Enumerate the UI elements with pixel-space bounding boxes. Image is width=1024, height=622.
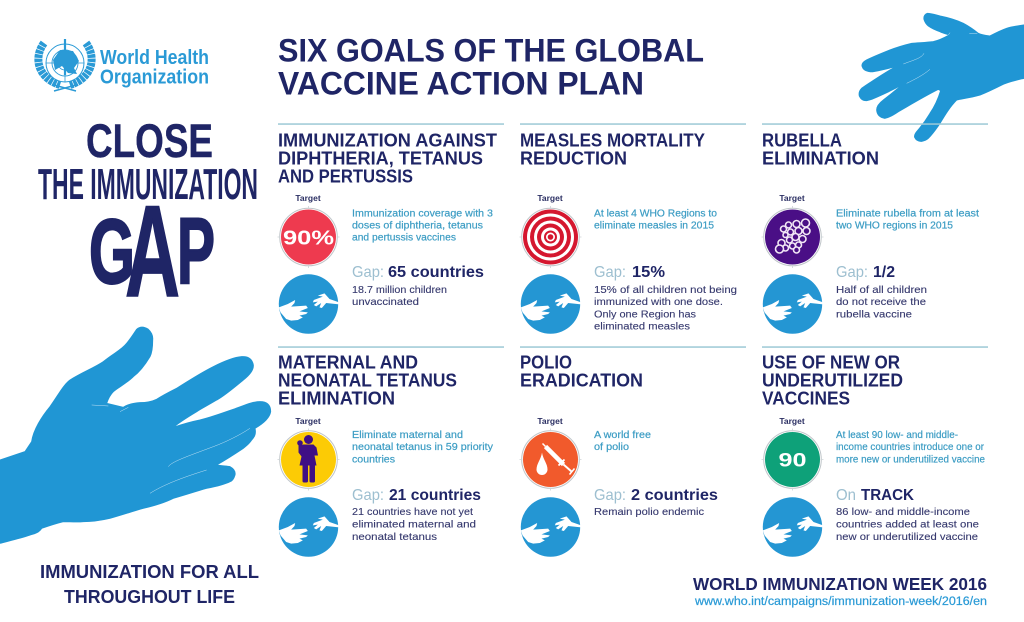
heading: ELIMINATION <box>762 148 879 168</box>
logo text: Organization <box>100 66 209 88</box>
icon: hands <box>521 274 581 334</box>
target description <box>352 430 493 466</box>
icon: 90 percent target <box>278 206 340 268</box>
panel: WHO logo <box>38 39 209 91</box>
footer: world immunization week: WORLD IMMUNIZATION WEEK 2016 <box>693 574 987 594</box>
gap description: 15% of all children not being <box>594 284 737 296</box>
slogan: immunization for all throughout life: THROUGHOUT LIFE <box>64 587 235 607</box>
status description <box>836 506 979 543</box>
heading: close the immunization gap: A <box>125 178 180 324</box>
status description: 86 low- and middle-income <box>836 506 970 518</box>
campaign url: www.who.int/campaigns/immunization-week/2016/en <box>694 596 987 608</box>
heading: POLIO <box>520 352 572 372</box>
status description: countries added at least one <box>836 518 979 530</box>
icon: 90 target: 90 <box>778 450 807 472</box>
title: SIX GOALS OF THE GLOBAL <box>278 32 704 68</box>
logo text <box>100 47 209 88</box>
icon: rubella virus cluster <box>762 206 824 268</box>
gap description: Only one Region has <box>594 308 696 320</box>
heading <box>278 352 457 408</box>
heading <box>520 352 643 390</box>
heading: RUBELLA <box>762 130 842 150</box>
panel: diphtheria, tetanus and pertussis <box>278 123 504 334</box>
gap description: immunized with one dose. <box>594 296 723 308</box>
heading: REDUCTION <box>520 148 627 168</box>
heading: close the immunization gap <box>38 114 258 324</box>
target description <box>836 430 985 466</box>
heading: AND PERTUSSIS <box>278 166 413 186</box>
target description: At least 4 WHO Regions to <box>594 208 717 220</box>
gap description: 18.7 million children <box>352 284 447 296</box>
target description: Eliminate maternal and <box>352 430 463 441</box>
panel: new or underutilized vaccines <box>762 346 988 557</box>
target description: A world free <box>594 430 651 441</box>
target description <box>594 430 651 453</box>
heading: close the immunization gap: P <box>177 198 215 303</box>
gap description <box>594 284 737 332</box>
gap description: Half of all children <box>836 284 927 296</box>
gap value: Gap: <box>594 264 626 281</box>
heading: close the immunization gap: G <box>89 201 135 303</box>
gap description <box>352 506 476 543</box>
target description <box>836 208 979 232</box>
panel: polio eradication <box>520 346 746 557</box>
gap description <box>836 284 927 320</box>
gap value <box>594 264 665 281</box>
icon: mother and child <box>278 428 340 490</box>
gap description <box>352 284 447 308</box>
gap description: 21 countries have not yet <box>352 506 473 518</box>
illustration: large left hand <box>0 327 271 543</box>
heading: USE OF NEW OR <box>762 352 900 372</box>
target description: eliminate measles in 2015 <box>594 220 714 232</box>
heading <box>278 130 497 186</box>
gap description: Remain polio endemic <box>594 506 704 518</box>
heading: MATERNAL AND <box>278 352 418 372</box>
gap description: eliminated measles <box>594 320 690 332</box>
gap description: rubella vaccine <box>836 308 912 320</box>
icon: hands <box>763 497 823 557</box>
target description: doses of diphtheria, tetanus <box>352 220 483 232</box>
gap value: 1/2 <box>873 264 895 281</box>
icon: hands <box>279 497 339 557</box>
logo text: World Health <box>100 47 209 69</box>
target description <box>594 208 717 232</box>
target description: At least 90 low- and middle- <box>836 430 958 441</box>
target label: Target <box>779 193 805 203</box>
gap description: eliminated maternal and <box>352 518 476 530</box>
status value: TRACK <box>861 487 914 504</box>
icon: hands <box>521 497 581 557</box>
target label: Target <box>295 416 321 426</box>
icon: 90 percent target: 90% <box>283 228 334 250</box>
status description: new or underutilized vaccine <box>836 531 978 543</box>
icon: hands <box>763 274 823 334</box>
heading: IMMUNIZATION AGAINST <box>278 130 497 150</box>
target description: neonatal tetanus in 59 priority <box>352 442 493 453</box>
heading: DIPHTHERIA, TETANUS <box>278 148 483 168</box>
gap value: 65 countries <box>388 264 484 281</box>
panel: measles mortality reduction <box>520 123 746 334</box>
gap value: 21 countries <box>389 487 481 504</box>
target label: Target <box>779 416 805 426</box>
heading <box>520 130 705 168</box>
target description: Eliminate rubella from at least <box>836 208 979 220</box>
title: VACCINE ACTION PLAN <box>278 66 644 102</box>
target description: of polio <box>594 442 629 453</box>
target description: more new or underutilized vaccine <box>836 454 985 466</box>
heading: ELIMINATION <box>278 388 395 408</box>
slogan: immunization for all throughout life: IMMUNIZATION FOR ALL <box>40 562 259 582</box>
icon: 90 target <box>762 428 824 490</box>
target description <box>352 208 493 244</box>
heading: VACCINES <box>762 388 850 408</box>
target description: Immunization coverage with 3 <box>352 208 493 220</box>
heading: close the immunization gap: THE IMMUNIZATION <box>38 160 258 209</box>
gap description: do not receive the <box>836 296 926 308</box>
gap description: neonatal tetanus <box>352 531 437 543</box>
icon: WHO emblem <box>38 39 92 91</box>
panel: maternal and neonatal tetanus elimination <box>278 346 504 557</box>
footer: world immunization week <box>693 574 987 608</box>
gap value: Gap: <box>352 487 384 504</box>
status value <box>836 487 914 504</box>
gap value: 2 countries <box>631 487 718 504</box>
gap value: 15% <box>632 264 665 281</box>
gap value: Gap: <box>352 264 384 281</box>
illustration: upper right hand <box>859 13 1024 141</box>
heading: NEONATAL TETANUS <box>278 370 457 390</box>
target label: Target <box>295 193 321 203</box>
target description: two WHO regions in 2015 <box>836 220 953 232</box>
target label: Target <box>537 416 563 426</box>
heading: MEASLES MORTALITY <box>520 130 705 150</box>
gap value <box>836 264 895 281</box>
heading <box>762 130 879 168</box>
target description: and pertussis vaccines <box>352 232 456 244</box>
gap description: unvaccinated <box>352 296 419 308</box>
title <box>278 32 704 102</box>
slogan: immunization for all throughout life <box>40 562 259 607</box>
icon: hands <box>279 274 339 334</box>
heading: ERADICATION <box>520 370 643 390</box>
icon: polio drop and syringe <box>520 428 582 490</box>
target label: Target <box>537 193 563 203</box>
heading <box>762 352 903 408</box>
icon: bullseye <box>520 206 582 268</box>
target description: income countries introduce one or <box>836 442 985 453</box>
target description: countries <box>352 454 395 466</box>
gap value: Gap: <box>836 264 868 281</box>
gap value <box>594 487 718 504</box>
status value: On <box>836 487 856 504</box>
panel: rubella elimination <box>762 123 988 334</box>
gap value: Gap: <box>594 487 626 504</box>
heading: UNDERUTILIZED <box>762 370 903 390</box>
heading: close the immunization gap: CLOSE <box>86 114 213 167</box>
